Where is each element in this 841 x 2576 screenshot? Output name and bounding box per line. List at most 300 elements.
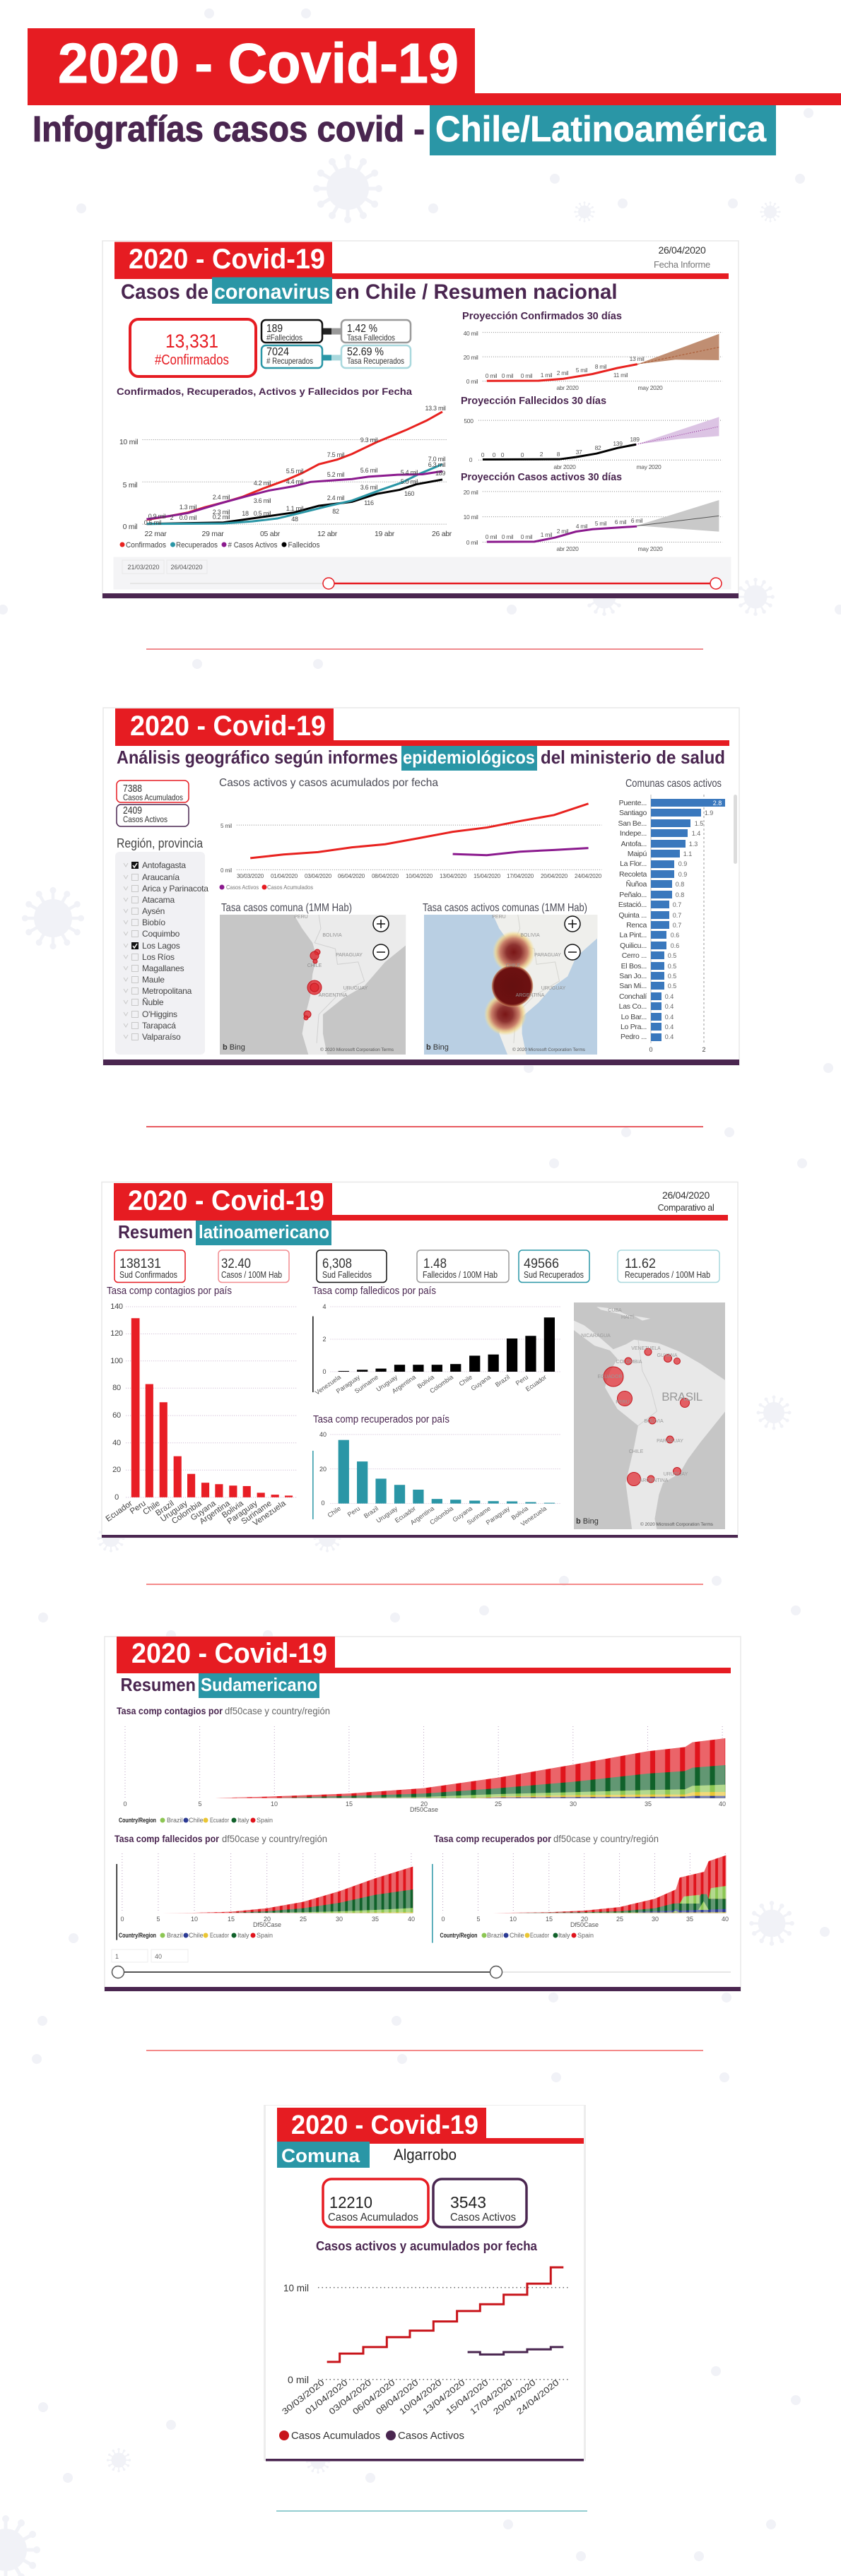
map: heatmap casos activos: b Bing (426, 1043, 449, 1052)
chart: proyeccion fallecidos (464, 417, 722, 470)
line chart: casos activos y acumulados: 0 mil (220, 867, 232, 874)
legend (440, 1932, 594, 1939)
chart: proyeccion casos activos: 20 mil (464, 489, 478, 496)
heading: proyeccion confirmados: Proyección Confirmados 30 días (462, 310, 622, 322)
bar chart: contagios por pais: Peru (129, 1500, 148, 1516)
step line chart: casos activos y acumulados: 24/04/2020 (514, 2378, 561, 2416)
bar chart: comunas casos activos: Ñuñoa (626, 879, 647, 889)
KPI: casos acumulados (117, 780, 189, 802)
bar chart: recuperados por pais: Venezuela (519, 1504, 548, 1528)
bar chart: contagios por pais: Brazil (154, 1500, 176, 1518)
chart: proyeccion fallecidos: 8 (557, 451, 560, 458)
bar chart: comunas casos activos: Quinta ... (618, 911, 647, 920)
bar chart: comunas casos activos: 0.5 (668, 963, 676, 970)
map: tasa casos comuna: b Bing (223, 1043, 245, 1052)
bar chart: fallecidos por pais: Uruguay (375, 1373, 399, 1393)
chart: proyeccion confirmados: 11 mil (613, 372, 628, 379)
KPI row: 11.62 (625, 1257, 656, 1271)
heading: recuperados por df50case: df50case y country/región (553, 1833, 659, 1844)
bar chart: comunas casos activos: 0.7 (673, 901, 681, 908)
panel header (115, 708, 729, 746)
line chart: confirmados recuperados activos fallecidos: 82 (332, 508, 339, 515)
slicer: region provincia: Biobío (142, 918, 165, 927)
legend: Casos Activos (398, 2430, 464, 2442)
area chart: contagios: 10 (271, 1800, 278, 1808)
slicer: region provincia: Aysén (142, 906, 165, 916)
line chart: confirmados recuperados activos fallecidos: 05 abr (260, 530, 281, 538)
panel header: 2020 - Covid-19 (128, 1185, 324, 1216)
KPI: casos activos: 3543 (450, 2193, 486, 2212)
area chart: recuperados: 30 (652, 1916, 659, 1923)
chart: proyeccion confirmados: 40 mil (464, 330, 478, 337)
legend: Chile (189, 1932, 204, 1939)
bar chart: contagios por pais: 80 (112, 1384, 121, 1392)
area chart: recuperados: 10 (510, 1916, 517, 1923)
heading: tasa casos comuna: Tasa casos comuna (1MM Hab) (221, 902, 352, 914)
area chart: fallecidos: 0 (120, 1916, 124, 1923)
report date: Fecha Informe (654, 259, 710, 270)
bar chart: comunas casos activos: La Flor... (620, 860, 647, 868)
KPI row: 6,308 (322, 1257, 352, 1271)
panel: resumen latinoamericano (102, 1182, 738, 1538)
line chart: casos activos y acumulados: 17/04/2020 (507, 873, 534, 879)
step line chart: casos activos y acumulados: 06/04/2020 (351, 2378, 397, 2416)
area chart: fallecidos: 20 (264, 1916, 271, 1923)
bar chart: comunas casos activos: 2 (702, 1046, 706, 1053)
line chart: confirmados recuperados activos fallecidos: 116 (364, 499, 374, 506)
main header banner (28, 28, 841, 105)
panel header: 2020 - Covid-19 (131, 1638, 327, 1669)
line chart: casos activos y acumulados: 5 mil (220, 823, 232, 829)
chart: proyeccion casos activos: 4 mil (576, 523, 588, 530)
panel header (117, 1637, 731, 1673)
chart: proyeccion fallecidos: 0 (501, 451, 505, 458)
bar chart: comunas casos activos: Lo Pra... (621, 1023, 647, 1031)
line chart: confirmados recuperados activos fallecidos: 5.0 mil (401, 478, 418, 485)
bar chart: comunas casos activos: Puente... (619, 799, 647, 807)
bar chart: contagios por pais: 60 (112, 1411, 121, 1420)
bar chart: contagios por pais: 0 (114, 1493, 119, 1502)
area chart: fallecidos: 5 (156, 1916, 160, 1923)
line chart: confirmados recuperados activos fallecidos: 10 mil (119, 438, 138, 446)
bar chart: comunas casos activos: San Jo... (619, 972, 647, 980)
slicer: region provincia: Metropolitana (142, 986, 192, 996)
bar chart: fallecidos por pais: 0 (322, 1368, 327, 1375)
panel heading (117, 746, 725, 771)
legend (119, 1817, 273, 1824)
comuna label (277, 2142, 370, 2168)
KPI row: 1.48 (423, 1257, 447, 1271)
KPI: fallecidos: 189 (266, 323, 283, 335)
bar chart: comunas casos activos: 0.5 (668, 952, 676, 959)
report date (654, 244, 710, 270)
bar chart: comunas casos activos: Antofa... (621, 840, 647, 848)
divider (276, 2510, 587, 2512)
bar chart: fallecidos por pais: Ecuador (524, 1373, 548, 1393)
line chart: casos activos y acumulados: 20/04/2020 (541, 873, 568, 879)
heading: fallecidos por df50case (114, 1833, 327, 1844)
bar chart: recuperados por pais: Ecuador (394, 1504, 417, 1524)
area chart: contagios: 20 (420, 1800, 428, 1808)
map: tasa casos comuna: CHILE (307, 963, 322, 968)
KPI: confirmados: 13,331 (165, 331, 218, 352)
line chart: casos activos y acumulados: 06/04/2020 (338, 873, 365, 879)
line chart: confirmados recuperados activos fallecidos: 4.2 mil (254, 480, 271, 487)
chart: proyeccion casos activos: may 2020 (638, 545, 663, 552)
panel header (277, 2108, 584, 2144)
heading: recuperados por df50case (434, 1833, 659, 1844)
chart: proyeccion confirmados: 5 mil (576, 367, 588, 374)
legend: # Casos Activos (228, 541, 278, 550)
chart: proyeccion fallecidos: 500 (464, 417, 474, 425)
bar chart: recuperados por pais: 40 (319, 1431, 327, 1438)
line chart: confirmados recuperados activos fallecidos: 2.4 mil (213, 494, 230, 501)
legend: Brazil (487, 1932, 503, 1939)
map: heatmap casos activos: CHILE (506, 963, 521, 968)
line chart: casos activos y acumulados: 10/04/2020 (406, 873, 433, 879)
map: sudamerica: VENEZUELA (631, 1346, 661, 1351)
chart: proyeccion confirmados: 20 mil (464, 354, 478, 361)
slicer: region provincia: Región, provincia (117, 836, 204, 850)
map: sudamerica: ECUADOR (597, 1375, 623, 1379)
bar chart: comunas casos activos: 0.5 (668, 973, 676, 980)
area chart: contagios: 15 (346, 1800, 353, 1808)
KPI row: Sud Recuperados (524, 1269, 584, 1280)
bar chart: comunas casos activos: Maipú (628, 850, 647, 858)
bar chart: comunas casos activos: 0.4 (665, 1023, 674, 1031)
bar chart: comunas casos activos: 0.9 (678, 860, 687, 867)
panel header: 2020 - Covid-19 (129, 244, 325, 275)
KPI row: Sud Fallecidos (322, 1269, 372, 1280)
line chart: confirmados recuperados activos fallecidos: 0.0 mil (180, 514, 196, 521)
KPI: casos activos (117, 805, 189, 826)
bar chart: recuperados por pais: Colombia (428, 1504, 454, 1526)
line chart: confirmados recuperados activos fallecidos: 0 mil (123, 523, 137, 531)
bar chart: comunas casos activos: 0.5 (668, 983, 676, 990)
panel heading: Resumen (118, 1221, 193, 1242)
line chart: confirmados recuperados activos fallecidos: 29 mar (202, 530, 224, 538)
bar chart: fallecidos por pais: Argentina (391, 1373, 417, 1395)
heading: contagios por df50case (117, 1705, 330, 1716)
map: sudamerica: HAITÍ (621, 1314, 634, 1320)
line chart: casos activos y acumulados: 08/04/2020 (372, 873, 399, 879)
bar chart: recuperados por pais: Brazil (363, 1504, 380, 1520)
chart: proyeccion casos activos: 2 mil (557, 528, 569, 535)
chart heading: Casos activos y acumulados por fecha (316, 2239, 538, 2253)
bar chart: comunas casos activos: 0.8 (676, 891, 684, 898)
line chart: confirmados recuperados activos fallecidos: 2.4 mil (327, 494, 344, 501)
bar chart: comunas casos activos: 1.4 (692, 830, 700, 837)
line chart: confirmados recuperados activos fallecidos: 3.6 mil (254, 497, 271, 504)
KPI: casos activos: Casos Activos (450, 2212, 516, 2224)
line chart: confirmados recuperados activos fallecidos: 1.1 mil (286, 505, 303, 512)
chart: proyeccion confirmados: 0 mil (502, 372, 514, 379)
area chart: recuperados: 25 (616, 1916, 623, 1923)
heading: fallecidos por df50case: df50case y country/región (222, 1833, 327, 1844)
line chart: casos activos y acumulados (219, 804, 602, 891)
bar chart: recuperados por pais: Bolivia (510, 1504, 529, 1521)
bar chart: comunas casos activos: San Be... (618, 819, 647, 828)
KPI row: 138131 (119, 1257, 161, 1271)
step line chart: casos activos y acumulados: 15/04/2020 (444, 2378, 490, 2416)
line chart: confirmados recuperados activos fallecidos: 22 mar (145, 530, 167, 538)
bar chart: fallecidos por pais: Brazil (494, 1373, 511, 1389)
line chart: confirmados recuperados activos fallecidos: 7.0 mil (428, 456, 445, 463)
KPI: casos activos: Casos Activos (123, 814, 167, 824)
legend: Chile (189, 1817, 204, 1824)
chart: proyeccion casos activos: 6 mil (615, 518, 627, 526)
line chart: confirmados recuperados activos fallecidos: 13.3 mil (425, 405, 446, 412)
area chart: fallecidos: 10 (191, 1916, 198, 1923)
map: sudamerica: URUGUAY (664, 1472, 688, 1477)
bar chart: contagios por pais: 120 (110, 1329, 123, 1338)
map: sudamerica (574, 1302, 725, 1529)
panel heading: Análisis geográfico según informes (117, 747, 398, 768)
chart: proyeccion casos activos (464, 489, 722, 552)
bar chart: fallecidos por pais: Venezuela (314, 1373, 342, 1396)
bar chart: comunas casos activos: 0.4 (665, 993, 674, 1000)
legend: Italy (237, 1932, 249, 1939)
legend: Casos Acumulados (267, 884, 313, 891)
bar chart: comunas casos activos: 0.7 (673, 922, 681, 929)
heading: contagios: Tasa comp contagios por país (107, 1285, 232, 1297)
line chart: confirmados recuperados activos fallecidos: 5.6 mil (360, 467, 377, 474)
line chart: confirmados recuperados activos fallecidos: 0.9 mil (148, 513, 165, 520)
chart: proyeccion fallecidos: 2 (540, 451, 543, 458)
heading: tasa casos activos comunas: Tasa casos activos comunas (1MM Hab) (423, 902, 587, 914)
line chart: confirmados recuperados activos fallecidos: 12 abr (317, 530, 338, 538)
legend: Country/Region (119, 1817, 156, 1824)
bar chart: comunas casos activos: Estació... (618, 901, 647, 909)
map: tasa casos comuna: URUGUAY (343, 986, 368, 991)
line chart: confirmados recuperados activos fallecidos: 9.3 mil (360, 437, 377, 444)
bar chart: comunas casos activos: Las Co... (619, 1002, 647, 1011)
legend (120, 541, 320, 550)
area chart: recuperados: 20 (581, 1916, 588, 1923)
map: tasa casos comuna: PERU (294, 915, 308, 920)
bar chart: fallecidos por pais: Chile (458, 1373, 474, 1387)
chart: proyeccion confirmados: 13 mil (630, 355, 645, 362)
bar chart: fallecidos por pais (313, 1303, 560, 1396)
chart: proyeccion fallecidos: abr 2020 (553, 463, 576, 470)
bar chart: fallecidos por pais: 4 (322, 1303, 327, 1310)
legend: Casos Acumulados (291, 2430, 380, 2442)
bar chart: contagios por pais: 20 (112, 1466, 121, 1474)
KPI row: Casos / 100M Hab (221, 1269, 282, 1280)
panel heading: Casos de (121, 280, 208, 304)
panel heading: epidemiológicos (403, 747, 535, 768)
date range slicer (113, 557, 731, 589)
bar chart: recuperados por pais: 20 (319, 1466, 327, 1473)
step line chart: casos activos y acumulados: 01/04/2020 (303, 2378, 350, 2416)
area chart: contagios: 0 (123, 1800, 127, 1808)
area chart: contagios: 30 (570, 1800, 577, 1808)
line chart: confirmados recuperados activos fallecidos: 189 (435, 470, 445, 477)
map: sudamerica: b Bing (576, 1517, 599, 1526)
KPI: fallecidos: 1.42 % (347, 323, 377, 335)
chart: proyeccion casos activos: 1 mil (541, 531, 553, 538)
chart: proyeccion fallecidos: 82 (595, 444, 601, 451)
chart: proyeccion confirmados: 8 mil (595, 363, 607, 370)
area chart: fallecidos: Df50Case (253, 1921, 281, 1928)
heading: fallecidos: Tasa comp falledicos por país (312, 1285, 436, 1297)
bar chart: contagios por pais: Ecuador (105, 1500, 134, 1524)
area chart: contagios: Df50Case (410, 1806, 438, 1813)
chart: proyeccion casos activos: 0 mil (466, 539, 478, 546)
area chart: recuperados: 35 (686, 1916, 693, 1923)
bar chart: fallecidos por pais: Colombia (428, 1373, 454, 1394)
panel header: 2020 - Covid-19 (291, 2111, 478, 2140)
bar chart: recuperados por pais: Suriname (466, 1504, 492, 1526)
area chart: fallecidos (117, 1853, 415, 1940)
area chart: recuperados: 5 (476, 1916, 481, 1923)
bar chart: recuperados por pais: Argentina (409, 1504, 435, 1526)
line chart: confirmados recuperados activos fallecidos: 48 (291, 516, 298, 523)
KPI row: 49566 (524, 1257, 559, 1271)
chart: proyeccion fallecidos: 189 (630, 436, 640, 443)
heading: fallecidos por df50case: Tasa comp fallecidos por (114, 1833, 219, 1844)
legend: Country/Region (119, 1932, 156, 1939)
bar chart: comunas casos activos: 0 (649, 1046, 653, 1053)
slicer: region provincia (115, 836, 208, 1055)
bar chart: comunas casos activos: 0.7 (673, 912, 681, 919)
KPI: casos acumulados: Casos Acumulados (328, 2212, 418, 2224)
bar chart: comunas casos activos: Pedro ... (621, 1033, 647, 1041)
slicer: region provincia: Los Ríos (142, 952, 175, 962)
slicer: region provincia: Los Lagos (142, 941, 180, 951)
map: sudamerica: PERU (616, 1400, 630, 1405)
map: tasa casos comuna: ARGENTINA (319, 993, 348, 998)
legend: Spain (577, 1932, 594, 1939)
bar chart: contagios por pais: 40 (112, 1439, 121, 1447)
line chart: casos activos y acumulados: 01/04/2020 (271, 873, 298, 879)
df50case range slider (112, 1949, 731, 1978)
line chart: confirmados recuperados activos fallecidos: 4.4 mil (286, 478, 303, 485)
KPI: recuperados: 52.69 % (347, 346, 384, 358)
map: sudamerica: © 2020 Microsoft Corporation Terms (640, 1521, 714, 1527)
subtitle: Chile/Latinoamérica (435, 109, 767, 149)
KPI: recuperados: Tasa Recuperados (347, 356, 404, 366)
legend: Recuperados (176, 541, 218, 550)
bar chart: comunas casos activos: 1.1 (683, 850, 692, 857)
bar chart: recuperados por pais: Uruguay (375, 1504, 399, 1524)
bar chart: contagios por pais: Paraguay (226, 1499, 259, 1526)
bar chart: comunas casos activos: El Bos... (621, 962, 647, 971)
line chart: confirmados recuperados activos fallecidos: 0.5 mil (254, 510, 271, 517)
line chart: confirmados recuperados activos fallecidos: 19 abr (375, 530, 395, 538)
bar chart: fallecidos por pais: Bolivia (416, 1373, 435, 1390)
bar chart: comunas casos activos: 1.5 (695, 820, 703, 827)
bar chart: contagios por pais: Bolivia (220, 1499, 245, 1520)
divider (146, 1126, 703, 1127)
map: heatmap casos activos: PARAGUAY (534, 953, 561, 958)
panel: resumen nacional Chile (102, 241, 739, 598)
line chart: casos activos y acumulados: 15/04/2020 (474, 873, 501, 879)
line chart: confirmados recuperados activos fallecidos: 6.3 mil (428, 461, 445, 468)
bar chart: contagios por pais: Suriname (240, 1500, 274, 1526)
legend: Italy (237, 1817, 249, 1824)
divider (146, 2050, 703, 2051)
line chart: casos activos y acumulados: 13/04/2020 (440, 873, 467, 879)
bar chart: comunas casos activos: 0.8 (676, 881, 684, 888)
panel: analisis geografico (103, 708, 739, 1065)
slicer: region provincia: Ñuble (142, 997, 164, 1007)
legend (219, 884, 313, 891)
step line chart: casos activos y acumulados: 0 mil (288, 2374, 309, 2385)
panel heading (121, 277, 618, 304)
bar chart: fallecidos por pais: 2 (322, 1336, 327, 1343)
bar chart: comunas casos activos: 0.4 (665, 1014, 674, 1021)
chart: proyeccion casos activos: abr 2020 (556, 545, 579, 552)
bar chart: comunas casos activos: 0.6 (671, 932, 679, 939)
legend: Ecuador (210, 1932, 229, 1939)
line chart: confirmados recuperados activos fallecidos: 3.6 mil (360, 484, 377, 491)
legend (279, 2430, 464, 2442)
bar chart: comunas casos activos: San Mi... (619, 982, 647, 990)
slicer: region provincia: Coquimbo (142, 929, 180, 939)
map: heatmap casos activos: BOLIVIA (520, 933, 540, 938)
map: heatmap casos activos (424, 915, 597, 1055)
panel header: 2020 - Covid-19 (130, 711, 326, 742)
area chart: fallecidos: 25 (300, 1916, 307, 1923)
step line chart: casos activos y acumulados: 08/04/2020 (374, 2378, 420, 2416)
panel heading: del ministerio de salud (541, 747, 725, 768)
heading: casos activos y acumulados: Casos activos y casos acumulados por fecha (219, 777, 438, 789)
chart: proyeccion confirmados: may 2020 (638, 384, 663, 391)
bar chart: comunas casos activos: 0.4 (665, 1003, 674, 1010)
bar chart: comunas casos activos: La Pint... (620, 931, 647, 939)
chart: proyeccion fallecidos: 37 (576, 449, 582, 456)
KPI: fallecidos: #Fallecidos (266, 333, 302, 343)
KPI: casos acumulados: 7388 (123, 783, 142, 795)
KPI row: Fallecidos / 100M Hab (423, 1269, 498, 1280)
chart: proyeccion confirmados: abr 2020 (556, 384, 579, 391)
bar chart: recuperados por pais: Paraguay (485, 1504, 512, 1526)
selected comuna: Algarrobo (394, 2146, 457, 2164)
subtitle: Infografías casos covid - (33, 109, 425, 149)
chart: proyeccion fallecidos: may 2020 (637, 463, 661, 470)
chart: proyeccion fallecidos: 0 (469, 456, 473, 463)
heading: proyeccion casos activos: Proyección Casos activos 30 días (461, 471, 622, 483)
bar chart: contagios por pais: 140 (110, 1302, 123, 1311)
area chart: recuperados (433, 1853, 729, 1943)
line chart: confirmados recuperados activos fallecidos: 0.5 mil (144, 519, 161, 526)
area chart: contagios (119, 1726, 726, 1824)
bar chart: comunas casos activos: Lo Bar... (621, 1013, 647, 1021)
comparison date: Comparativo al (658, 1203, 714, 1213)
panel heading: coronavirus (214, 280, 330, 304)
legend: Spain (257, 1817, 273, 1824)
area chart: fallecidos: 30 (336, 1916, 343, 1923)
comuna label: Comuna (281, 2145, 360, 2166)
heading: contagios por df50case: df50case y country/región (225, 1705, 330, 1716)
bar chart: comunas casos activos: Santiago (619, 809, 647, 817)
legend: Chile (510, 1932, 524, 1939)
area chart: contagios: 5 (198, 1800, 202, 1808)
chart: proyeccion casos activos: 6 mil (631, 517, 643, 524)
step line chart: casos activos y acumulados: 17/04/2020 (468, 2378, 514, 2416)
bar chart: comunas casos activos: Peñalo... (619, 891, 647, 899)
panel header (114, 242, 729, 279)
slicer: region provincia: Araucanía (142, 872, 180, 882)
step line chart: casos activos y acumulados: 03/04/2020 (327, 2378, 373, 2416)
chart: proyeccion casos activos: 0 mil (486, 533, 498, 540)
bar chart: comunas casos activos: Cerro ... (622, 951, 647, 960)
df50case range slider: 40 (155, 1953, 162, 1960)
KPI: casos activos: 2409 (123, 805, 142, 817)
chart: proyeccion casos activos: 5 mil (595, 520, 607, 527)
bar chart: fallecidos por pais: Guyana (470, 1373, 492, 1392)
